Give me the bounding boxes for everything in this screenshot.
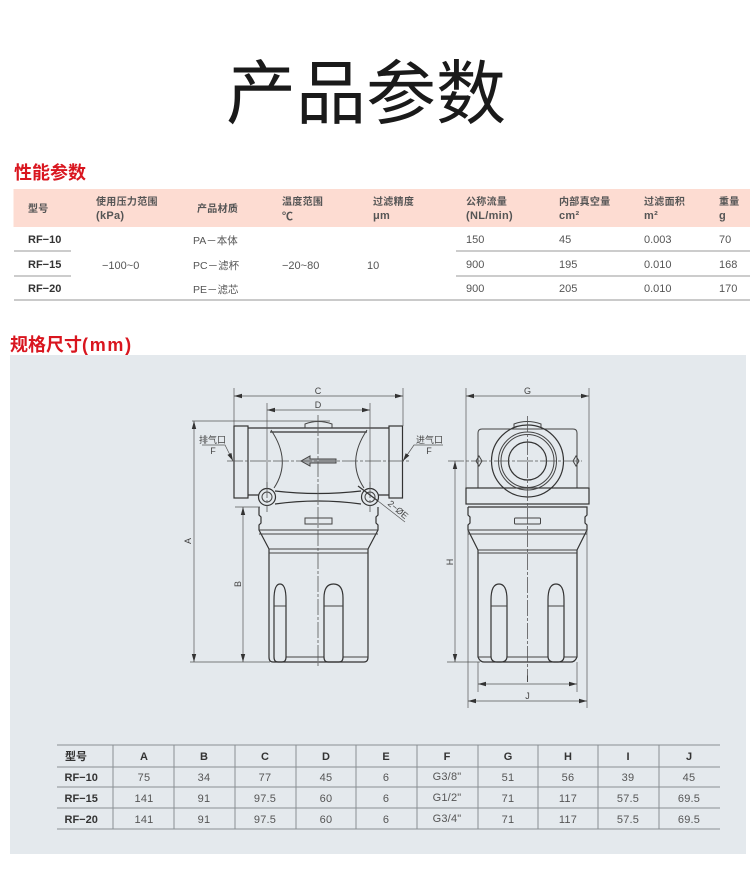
dimension C [234, 386, 403, 426]
dimensions table header: A [140, 751, 148, 763]
dimensions row RF-10 [64, 771, 695, 784]
drawing: side view [445, 386, 589, 708]
table header row: 型号 [28, 202, 49, 215]
dimensions row RF-15: 141 [135, 793, 153, 805]
table row RF-10: 45 [559, 234, 571, 246]
dimensions table header: G [504, 751, 512, 763]
dimensions row RF-10: 77 [259, 772, 271, 784]
table header row: 内部真空量 [559, 195, 610, 208]
dimensions row RF-10: 45 [683, 772, 695, 784]
drawing: front view [183, 386, 443, 668]
front view upper housing [234, 422, 402, 506]
dimensions row RF-15: 91 [198, 793, 210, 805]
label: exhaust port: 排气口 [199, 434, 226, 445]
dimensions row RF-10: 51 [502, 772, 514, 784]
table row RF-10 [28, 234, 731, 246]
dimensions row RF-20: 71 [502, 814, 514, 826]
dimensions row RF-20: 141 [135, 814, 153, 826]
dimensions row RF-10: G3/8" [433, 771, 461, 783]
dimensions row RF-15: 57.5 [617, 793, 639, 805]
table header row: 重量 [719, 195, 740, 208]
dimensions row RF-15: 71 [502, 793, 514, 805]
table header row: m² [644, 210, 658, 222]
table row RF-10: 0.003 [644, 234, 672, 246]
dimensions row RF-20: 69.5 [678, 814, 700, 826]
dimensions table header: H [564, 751, 572, 763]
dimension H: H [445, 559, 455, 565]
panel: dimensions background [10, 355, 746, 854]
dimension G [466, 386, 589, 488]
table shared cells: −100~0 [102, 260, 139, 272]
label: inlet port [403, 434, 443, 461]
table row RF-10: 150 [466, 234, 484, 246]
front view centre lines [227, 415, 410, 668]
dimensions row RF-20: G3/4" [433, 813, 461, 825]
table header row [14, 189, 750, 227]
heading: dimensions: 规格尺寸(mm) [10, 335, 133, 355]
table row RF-15: 168 [719, 259, 737, 271]
side view centre lines [448, 416, 582, 682]
dimensions row RF-20: RF−20 [64, 814, 98, 826]
table row RF-20: 900 [466, 283, 484, 295]
label: 2-ØE hole callout [358, 486, 410, 522]
table shared cells: 10 [367, 260, 379, 272]
table row RF-15: RF−15 [28, 259, 61, 271]
front view lower bowl [259, 507, 378, 662]
table shared cells: PC－滤杯 [193, 259, 240, 272]
side view lower bowl [468, 507, 587, 662]
table shared cells: −20~80 [282, 260, 319, 272]
table header row: 过滤面积 [644, 195, 685, 208]
table row RF-10: 70 [719, 234, 731, 246]
dimensions row RF-10: 34 [198, 772, 210, 784]
dimensions table header: D [322, 751, 330, 763]
dimensions row RF-10: 56 [562, 772, 574, 784]
table header row: (NL/min) [466, 210, 513, 222]
table header row: μm [373, 210, 390, 222]
dimensions row RF-20: 6 [383, 814, 389, 826]
table header row: (kPa) [96, 210, 124, 222]
dimensions row RF-15: 60 [320, 793, 332, 805]
table row RF-20: 170 [719, 283, 737, 295]
table row RF-15: 900 [466, 259, 484, 271]
dimension C: C [315, 386, 322, 396]
dimensions row RF-20: 60 [320, 814, 332, 826]
table shared cells [102, 234, 379, 296]
table row RF-15 [28, 259, 737, 271]
dimensions row RF-10: 39 [622, 772, 634, 784]
dimension D [267, 400, 370, 488]
dimensions row RF-10: 45 [320, 772, 332, 784]
dimension A: A [183, 538, 193, 544]
table row RF-20: 0.010 [644, 283, 672, 295]
dimensions table header: I [626, 751, 630, 763]
table row RF-20: RF−20 [28, 283, 61, 295]
dimensions table header: B [200, 751, 208, 763]
heading: performance parameters: 性能参数 [14, 162, 86, 183]
table header row: cm² [559, 210, 579, 222]
dimensions row RF-15: G1/2" [433, 792, 461, 804]
dimensions table header: J [686, 751, 692, 763]
table header row: g [719, 210, 726, 222]
dimensions row RF-10: RF−10 [64, 772, 98, 784]
dimensions row RF-20: 57.5 [617, 814, 639, 826]
dimensions table header: 型号 [65, 750, 87, 763]
dimensions table header: E [382, 751, 390, 763]
dimension D: D [315, 400, 322, 410]
dimensions row RF-15: 117 [559, 793, 577, 805]
dimension B: B [233, 581, 243, 587]
table row RF-20: 205 [559, 283, 577, 295]
dimensions table header: C [261, 751, 269, 763]
label: exhaust port [199, 434, 233, 461]
label: inlet port: 进气口 [416, 434, 443, 445]
dimensions row RF-15: 6 [383, 793, 389, 805]
dimensions row RF-15: 97.5 [254, 793, 276, 805]
dimensions row RF-10: 75 [138, 772, 150, 784]
table header row: 过滤精度 [373, 195, 414, 208]
label: 2-ØE hole callout: 2−ØE [386, 498, 410, 521]
dimensions table header: F [444, 751, 451, 763]
dimensions row RF-20 [64, 813, 700, 826]
dimension A [183, 421, 330, 662]
table row RF-15: 195 [559, 259, 577, 271]
dimensions row RF-20: 117 [559, 814, 577, 826]
panel: performance table [14, 189, 750, 300]
table header row: 温度范围 [282, 195, 323, 208]
icon: flow direction arrow [301, 456, 336, 466]
dimensions row RF-20: 91 [198, 814, 210, 826]
title: 产品参数 [226, 55, 506, 133]
dimensions row RF-15: RF−15 [64, 793, 98, 805]
dimensions row RF-15: 69.5 [678, 793, 700, 805]
dimension G: G [524, 386, 531, 396]
table row RF-20 [28, 283, 737, 295]
table shared cells: PE－滤芯 [193, 283, 239, 296]
dimension I [478, 662, 577, 692]
table row RF-10: RF−10 [28, 234, 61, 246]
dimension J [468, 530, 587, 708]
dimensions row RF-20: 97.5 [254, 814, 276, 826]
label: inlet port: F [426, 446, 432, 456]
dimension I: I [526, 674, 529, 684]
panel: dimensions table [57, 745, 720, 829]
dimension J: J [525, 691, 530, 701]
label: exhaust port: F [210, 446, 216, 456]
table header row: 使用压力范围 [96, 195, 158, 208]
table header row: 产品材质 [197, 202, 238, 215]
table header row: ℃ [282, 211, 293, 223]
dimensions row RF-10: 6 [383, 772, 389, 784]
side view upper housing [466, 422, 589, 504]
dimensions table header [65, 750, 692, 763]
dimensions row RF-15 [64, 792, 700, 805]
table row RF-15: 0.010 [644, 259, 672, 271]
table shared cells: PA－本体 [193, 234, 238, 247]
table header row: 公称流量 [466, 195, 507, 208]
